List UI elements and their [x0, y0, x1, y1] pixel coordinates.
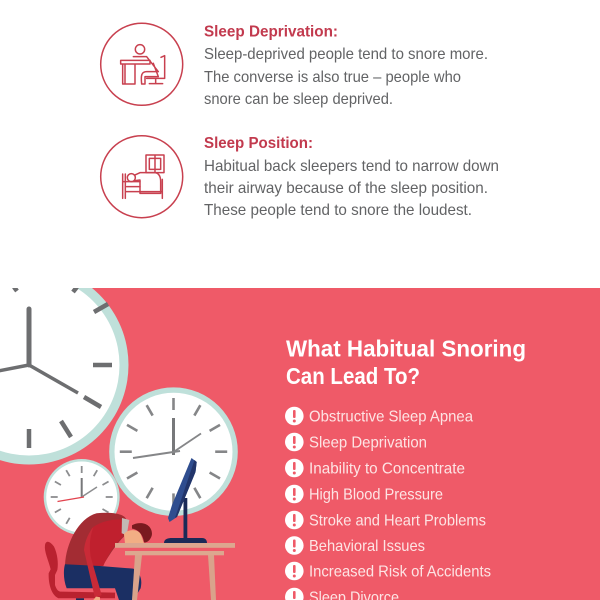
icon: person sleeping in bed [101, 136, 183, 218]
icon: large clock [0, 266, 128, 464]
text: sleep position description [204, 158, 499, 219]
list: consequences of snoring [285, 407, 491, 600]
heading: what habitual snoring can lead to [286, 336, 526, 389]
list item: high blood pressure: High Blood Pressure [309, 486, 443, 504]
text: sleep position description: These people tend to snore the loudest. [204, 202, 472, 219]
list item: obstructive sleep apnea: Obstructive Sleep Apnea [309, 408, 473, 426]
heading: sleep deprivation: Sleep Deprivation: [204, 24, 338, 40]
panel: habitual snoring background [0, 288, 600, 600]
heading: what habitual snoring can lead to: What Habitual Snoring [286, 336, 526, 362]
text: sleep position description: Habitual back sleepers tend to narrow down [204, 158, 499, 175]
panel: sleep deprivation [101, 23, 488, 108]
list item: sleep deprivation: Sleep Deprivation [309, 434, 427, 452]
panel: sleep position [101, 135, 499, 219]
list item: behavioral issues: Behavioral Issues [309, 538, 425, 555]
icon: small clock [44, 459, 120, 535]
icon: office chair [45, 542, 115, 600]
text: sleep deprivation description: Sleep-deprived people tend to snore more. [204, 46, 488, 63]
list item: sleep divorce [285, 588, 399, 600]
icon: exhausted person [64, 513, 152, 600]
list item: stroke and heart problems: Stroke and Heart Problems [309, 512, 486, 530]
list item: inability to concentrate: Inability to Concentrate [309, 460, 465, 478]
text: sleep position description: their airway because of the sleep position. [204, 180, 488, 197]
text: sleep deprivation description [204, 46, 488, 108]
icon: desk [115, 543, 235, 600]
illustration: clocks and exhausted person [0, 266, 238, 600]
heading: sleep position: Sleep Position: [204, 135, 313, 152]
heading: what habitual snoring can lead to: Can Lead To? [286, 363, 420, 389]
icon: medium clock [109, 387, 238, 516]
icon: computer monitor [164, 458, 207, 543]
icon: person sleeping at desk [101, 23, 183, 105]
text: sleep deprivation description: snore can be sleep deprived. [204, 91, 393, 108]
list item: increased risk of accidents: Increased Risk of Accidents [309, 564, 491, 580]
text: sleep deprivation description: The converse is also true – people who [204, 69, 461, 86]
